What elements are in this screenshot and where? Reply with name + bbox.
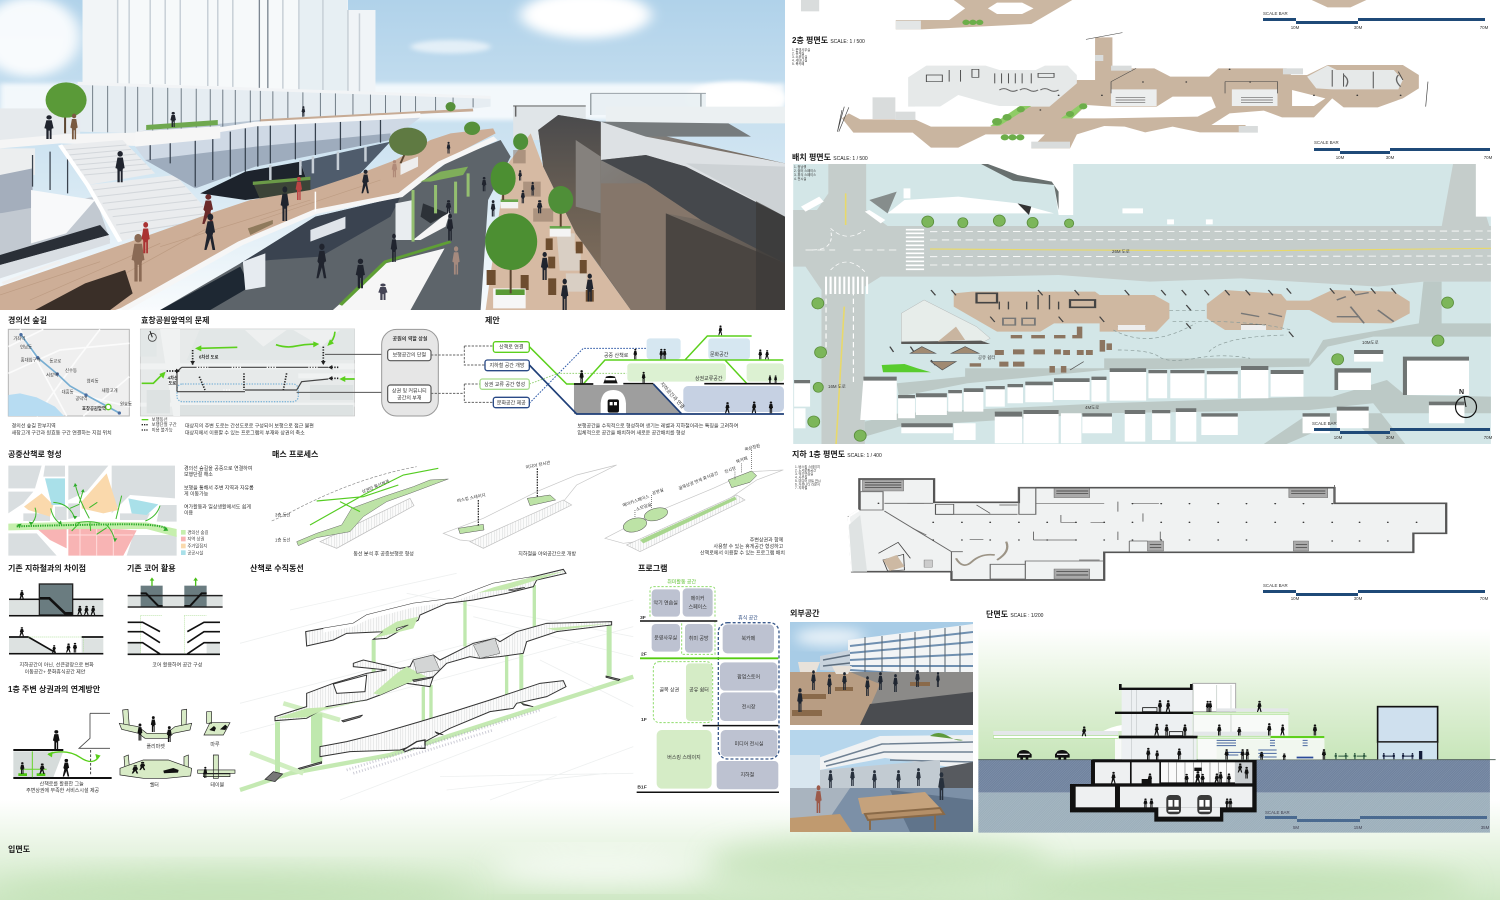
- panel: 경의선 숲길 location map: 공덕역: [75, 395, 87, 402]
- map caption: 경의선 숲길 한부지역: [12, 422, 56, 429]
- scale bar: basement plan: 10M: [1291, 596, 1300, 601]
- plan: site plan: [793, 164, 1494, 444]
- panel: site problem diagram: 도로: [168, 381, 176, 386]
- shopping street link section: 주변상권에 부족한 서비스시설 제공: [26, 787, 100, 794]
- scale bar: first floor plan: SCALE BAR: [1263, 11, 1288, 16]
- problem description: 대상지에서 이용할 수 있는 프로그램의 부재와 상권의 축소: [185, 429, 305, 436]
- scale bar: second floor plan: [1314, 140, 1493, 160]
- room legend: basement plan: 1. 버스킹 스테이지: [795, 464, 820, 469]
- north arrow: [1456, 389, 1476, 418]
- panel: program diagram: 지하철: [740, 772, 755, 779]
- panel: program diagram: 3F: [640, 615, 646, 621]
- render: exterior plaza view 2: [790, 730, 973, 832]
- scale bar: second floor plan: 10M: [1336, 155, 1345, 160]
- panel: program diagram: 스페이스: [688, 603, 707, 610]
- walkway description: 이용: [184, 509, 194, 516]
- mass diagram 3: 골목상권 연계 휴식공간: [677, 470, 719, 492]
- legend: walkway map: 주거밀집지: [187, 543, 207, 550]
- panel: 경의선 숲길 location map: 신수동: [65, 367, 77, 374]
- section scheme: 문화공간: [710, 351, 729, 358]
- legend: problem diagram: [142, 416, 177, 433]
- mass diagram 2: 버스킹 스테이지: [456, 491, 486, 504]
- underground layers: [978, 759, 1496, 833]
- white high-rise towers: [83, 0, 375, 93]
- proposal description: 입체적으로 공간을 배치하여 새로운 공간배치를 형성: [577, 429, 685, 436]
- left plaza, columns and stair: [0, 108, 210, 278]
- scale bar: section: SCALE BAR: [1265, 810, 1290, 815]
- section heading: 경의선 숲길: 경의선 숲길: [8, 315, 47, 325]
- scale bar: site plan: 70M: [1484, 435, 1493, 440]
- panel: site problem diagram: 4차선: [168, 374, 178, 381]
- room legend: basement plan: 2. 도서문화공간: [795, 468, 816, 472]
- panel: program diagram: 전시장: [742, 703, 756, 710]
- section scheme: 상권교류공간: [695, 375, 723, 382]
- panel: subway difference and core diagrams: 마루: [210, 741, 220, 748]
- people on deck: [44, 106, 593, 310]
- residential buildings: [794, 352, 1469, 443]
- section heading: 기존 코어 활용: 기존 코어 활용: [127, 563, 176, 573]
- site plan legend: 1. 정낭쉘: [794, 164, 806, 169]
- panel: program diagram: 골목 상권: [659, 686, 680, 693]
- neighbouring building: [1378, 707, 1438, 759]
- panel: program diagram: 2F: [641, 652, 647, 658]
- room legend: basement plan: 6. 커뮤니티 라운지: [795, 482, 820, 486]
- scale bar: second floor plan: SCALE BAR: [1314, 140, 1339, 145]
- panel: 경의선 숲길 location map: 효창공원앞역: [82, 405, 106, 412]
- mass diagram 2: [443, 459, 617, 558]
- solution labels: 상권 교류 공간 형성: [484, 381, 525, 388]
- panel: program diagram: 취미 공방: [689, 635, 709, 642]
- scale bar: second floor plan: 30M: [1386, 155, 1395, 160]
- panel: program diagram: 메이커: [691, 595, 705, 602]
- scale bar: section: 15M: [1354, 825, 1363, 830]
- panel: subway difference and core diagrams: 테이블: [210, 782, 225, 789]
- scale bar: first floor plan: 70M: [1480, 25, 1489, 30]
- road labels: 공유 쉼터: [978, 354, 995, 361]
- render: exterior plaza view 1: [790, 622, 973, 725]
- road labels: 10M도로: [1362, 340, 1379, 345]
- level 2 ribbon: [275, 622, 612, 721]
- section heading: 1층 주변 상권과의 연계방안: 1층 주변 상권과의 연계방안: [8, 684, 101, 694]
- upper glass storey: [78, 83, 491, 133]
- panel: program diagram: 팝업스토어: [737, 673, 760, 680]
- level 3 ribbon: [306, 569, 566, 646]
- section heading: 외부공간: 외부공간: [790, 608, 820, 618]
- legend: walkway map: 경의선 숲길: [187, 529, 208, 536]
- green island and pergola: [333, 157, 468, 310]
- second level glass: [135, 115, 421, 188]
- legend: walkway map: 공공시설: [187, 549, 203, 555]
- heading: second floor plan: 2층 평면도 SCALE: 1 / 500: [792, 35, 865, 45]
- panel: 경의선 숲길 location map: 연남동: [20, 343, 32, 349]
- walkway description: 여가활동과 일상생활에서도 쉽게: [184, 503, 251, 510]
- room legend: second floor plan: 2. 휴게실: [792, 50, 804, 56]
- cars: [1017, 750, 1070, 760]
- core use diagram: 코어 활용하여 공간 구성: [152, 662, 202, 669]
- room legend: second floor plan: 5. 북카페: [792, 61, 804, 66]
- panel: 경의선 숲길 location map: 가좌역: [13, 335, 25, 342]
- scale bar: first floor plan: 10M: [1291, 25, 1300, 30]
- room legend: basement plan: [795, 464, 821, 490]
- panel: 경의선 숲길 location map: 새창고개: [102, 387, 118, 394]
- section scheme: 지하공간과 연결: [658, 381, 686, 411]
- panel: program diagram: 휴식 공간: [738, 614, 758, 621]
- walkway description: 보행을 통해서 주변 지역과 자유롭: [184, 484, 254, 491]
- heading: site plan: 배치 평면도 SCALE: 1 / 500: [792, 152, 868, 162]
- people silhouettes: [1082, 700, 1326, 808]
- scale bar: first floor plan: [1263, 11, 1489, 30]
- panel: program diagram: 운영사무실: [654, 634, 678, 641]
- shopping street link section: [13, 713, 112, 794]
- section heading: 프로그램: 프로그램: [638, 563, 667, 573]
- heading: basement plan: 지하 1층 평면도 SCALE: 1 / 400: [792, 449, 882, 459]
- lost role box: 공간의 부재: [397, 394, 422, 401]
- panel: 경의선 숲길 location map: 서강역: [46, 372, 58, 379]
- mass diagram 1: [272, 467, 448, 558]
- plan: basement floor: [849, 479, 1446, 580]
- plaza decks: [882, 288, 1410, 373]
- panel: program diagram: 악기 연습실: [653, 599, 678, 606]
- subway difference diagram: 지하공간이 아닌, 선큰광장으로 변화: [19, 662, 94, 669]
- panel: site problem diagram: 6차선 도로: [199, 353, 219, 360]
- site plan legend: 2. 쉼터 스페이스: [794, 168, 816, 173]
- section heading: 산책로 수직동선: 산책로 수직동선: [250, 563, 304, 573]
- station box: [1070, 755, 1257, 822]
- roads: [793, 164, 1491, 444]
- north arrow: N: [1459, 389, 1464, 396]
- scale bar: section: [1265, 810, 1490, 830]
- legend: problem diagram: 보행단절 구간: [152, 421, 177, 428]
- section heading: 단면도: 단면도 SCALE : 1/200: [986, 609, 1044, 619]
- core use diagram: [128, 577, 223, 669]
- problem description: 대상지의 주변 도로는 간선도로로 구성되어 보행으로 접근 불편: [185, 423, 314, 430]
- mass diagram 3: 주변상권과 함께: [750, 537, 784, 544]
- room legend: basement plan: 7. 지하철: [795, 485, 807, 490]
- right terrace with tables: [486, 133, 631, 310]
- scale bar: basement plan: SCALE BAR: [1263, 583, 1288, 588]
- scale bar: site plan: 30M: [1386, 435, 1395, 440]
- section heading: 공중산책로 형성: 공중산책로 형성: [8, 449, 62, 459]
- solution labels: [480, 342, 529, 408]
- wooden deck walkway: [0, 128, 496, 310]
- road labels: 16M 도로: [828, 384, 846, 389]
- panel: program diagram: 북카페: [741, 635, 756, 642]
- panel: mass process diagrams: [272, 442, 785, 558]
- mass diagram 1: 3층 동선: [275, 512, 291, 518]
- mass diagram 1: 동선 분석 후 공중보행로 형성: [353, 551, 414, 558]
- walkway description: [184, 465, 254, 516]
- legend: problem diagram: 이용 불가능: [152, 426, 173, 433]
- scale bar: basement plan: 70M: [1480, 596, 1489, 601]
- subway difference diagram: 이동공간+ 문화휴식공간 제안: [25, 668, 86, 675]
- mass diagram 3: 사용할 수 있는 휴게공간 형성하고: [714, 543, 784, 550]
- room legend: second floor plan: 4. 세미나실: [792, 58, 807, 62]
- site plan legend: 4. 전시실: [794, 176, 806, 181]
- panel: 경의선 숲길 location map: 염리동: [87, 378, 99, 385]
- panel: program diagram: 공유 쉼터: [689, 686, 709, 693]
- shopping street link section: 산책로를 활용한 그늘: [40, 780, 84, 787]
- mass diagram 1: 1층 동선: [275, 537, 291, 543]
- section heading: 기존 지하철과의 차이점: 기존 지하철과의 차이점: [8, 563, 86, 573]
- solution labels: 산책로 연결: [499, 344, 524, 351]
- road labels: 4M도로: [1085, 405, 1099, 410]
- scale bar: basement plan: [1263, 583, 1489, 601]
- section scheme: 공중 산책로: [604, 352, 629, 359]
- room legend: second floor plan: 1. 운영사무실: [792, 47, 810, 52]
- room legend: basement plan: 5. 미디어 아트 전시: [795, 478, 821, 483]
- site plan legend: [794, 164, 816, 181]
- legend: walkway map: 지역 상권: [187, 536, 204, 543]
- scale bar: section: 5M: [1293, 825, 1299, 830]
- panel: program diagram: 미디어 전시실: [735, 740, 764, 747]
- scale bar: site plan: 10M: [1334, 435, 1343, 440]
- panel: program diagram: 1F: [641, 717, 647, 723]
- hero perspective render: [0, 0, 785, 310]
- mass diagram 1: 상권만 통선체계: [361, 478, 390, 495]
- panel: proposal concept diagram: [382, 325, 784, 436]
- panel: 경의선 숲길 location map: 홍대입구역: [21, 357, 41, 364]
- site trees: [808, 215, 1453, 441]
- section scheme: [529, 325, 784, 414]
- legend: problem diagram: 보행동선: [152, 416, 168, 422]
- landing slabs: [265, 676, 620, 782]
- dark underside and lower street: [160, 140, 511, 310]
- mass diagram 3: 소모임실: [635, 501, 652, 512]
- trees: [46, 82, 573, 293]
- mass diagram 3: 북카페: [735, 455, 749, 465]
- scale bar: first floor plan: 30M: [1354, 25, 1363, 30]
- mass diagram 2: 지하철을 야외공간으로 개방: [518, 551, 577, 558]
- panel: 경의선 숲길 location map: 원효동: [120, 401, 132, 407]
- panel: subway difference and core diagrams: 쉘터: [150, 782, 159, 789]
- mass diagram 3: 산책로에서 이용할 수 있는 프로그램 배치: [700, 550, 785, 557]
- section heading: 제안: 제안: [485, 315, 500, 325]
- road labels: 26M 도로: [1112, 249, 1130, 254]
- walkway description: 게 이동가능: [184, 490, 209, 497]
- mass diagram 3: 옥상정원: [744, 442, 761, 453]
- room legend: second floor plan: 3. 소모임실: [792, 54, 807, 59]
- scale bar: section: 35M: [1481, 825, 1490, 830]
- panel: subway difference and core diagrams: [9, 577, 235, 794]
- solution labels: 지하철 공간 개방: [490, 362, 525, 369]
- background glass roofs: [513, 93, 785, 140]
- legend: walkway map: [181, 529, 208, 555]
- mass diagram 2: 미디어 전시관: [525, 459, 551, 471]
- top buildings: [801, 164, 1213, 224]
- lost role box: 공원의 역할 상실: [393, 336, 428, 343]
- right building facade: [538, 115, 785, 310]
- building above ground: [993, 683, 1324, 762]
- panel: public walkway map: [8, 465, 254, 556]
- panel: program diagram: [637, 578, 779, 792]
- walkway description: 보행단절 해소: [184, 471, 213, 478]
- scale bar: site plan: SCALE BAR: [1312, 421, 1337, 426]
- panel: 경의선 숲길 location map: 대흥동: [62, 388, 74, 395]
- section heading: 매스 프로세스: 매스 프로세스: [272, 449, 319, 459]
- top right: fragment of first floor plan: [801, 0, 1366, 29]
- panel: program diagram: 취미활동 공간: [667, 578, 697, 585]
- lost role box: 상권 및 커뮤니티: [392, 388, 427, 395]
- room legend: second floor plan: [792, 47, 810, 66]
- level 1 ribbon: [320, 681, 566, 757]
- panel: 경의선 숲길 location map: 동교로: [49, 359, 61, 364]
- mass diagram 3: 메이커스페이스: [622, 493, 650, 509]
- mass diagram 3: 전시장: [723, 465, 737, 474]
- room legend: basement plan: 4. 사무실: [795, 474, 807, 480]
- lost role box: 보행공간의 단절: [393, 352, 426, 359]
- map caption: 새창고개 구간과 원효동 구간 연결하는 지점 위치: [12, 429, 112, 436]
- plan: second floor: [837, 33, 1428, 148]
- mass diagram 3: 공방실: [651, 486, 664, 496]
- panel: 경의선 숲길 location map: [8, 329, 132, 436]
- scale bar: site plan: [1312, 421, 1493, 440]
- panel: program diagram: B1F: [637, 784, 647, 790]
- scale bar: basement plan: 30M: [1354, 596, 1363, 601]
- site plan legend: 3. 휴식 스페이스: [794, 172, 816, 177]
- panel: subway difference and core diagrams: 플리마켓: [146, 743, 165, 750]
- drawing: cross section: [978, 628, 1496, 833]
- outdoor tables and people: [1334, 753, 1367, 759]
- proposal description: 보행공간을 수직적으로 형성하며 생기는 레벨과 지하철이라는 특징을 고려하여: [577, 423, 738, 430]
- mass diagram 3: [605, 442, 785, 557]
- scale bar: second floor plan: 70M: [1484, 155, 1493, 160]
- lost role box: [382, 329, 438, 416]
- panel: program diagram: 버스킹 스테이지: [667, 754, 701, 761]
- section heading: 입면도: 입면도: [8, 844, 31, 854]
- section heading: 효창공원앞역의 문제: 효창공원앞역의 문제: [141, 315, 209, 325]
- solution labels: 문화공간 제공: [497, 399, 526, 406]
- walkway description: 경의선 숲길을 공중으로 연결하여: [184, 465, 252, 472]
- panel: vertical circulation exploded axonometric: [240, 569, 633, 800]
- room legend: basement plan: 3. 악기연습실: [795, 471, 813, 476]
- watercolor green ground at bottom: [0, 800, 1500, 900]
- road labels: [828, 249, 1379, 410]
- furniture axonometrics: [119, 709, 235, 778]
- green walkway base and vertical links: [240, 585, 633, 790]
- subway difference diagram: [9, 584, 103, 675]
- yellow center lines: [836, 193, 1491, 444]
- panel: site problem diagram: [140, 329, 388, 436]
